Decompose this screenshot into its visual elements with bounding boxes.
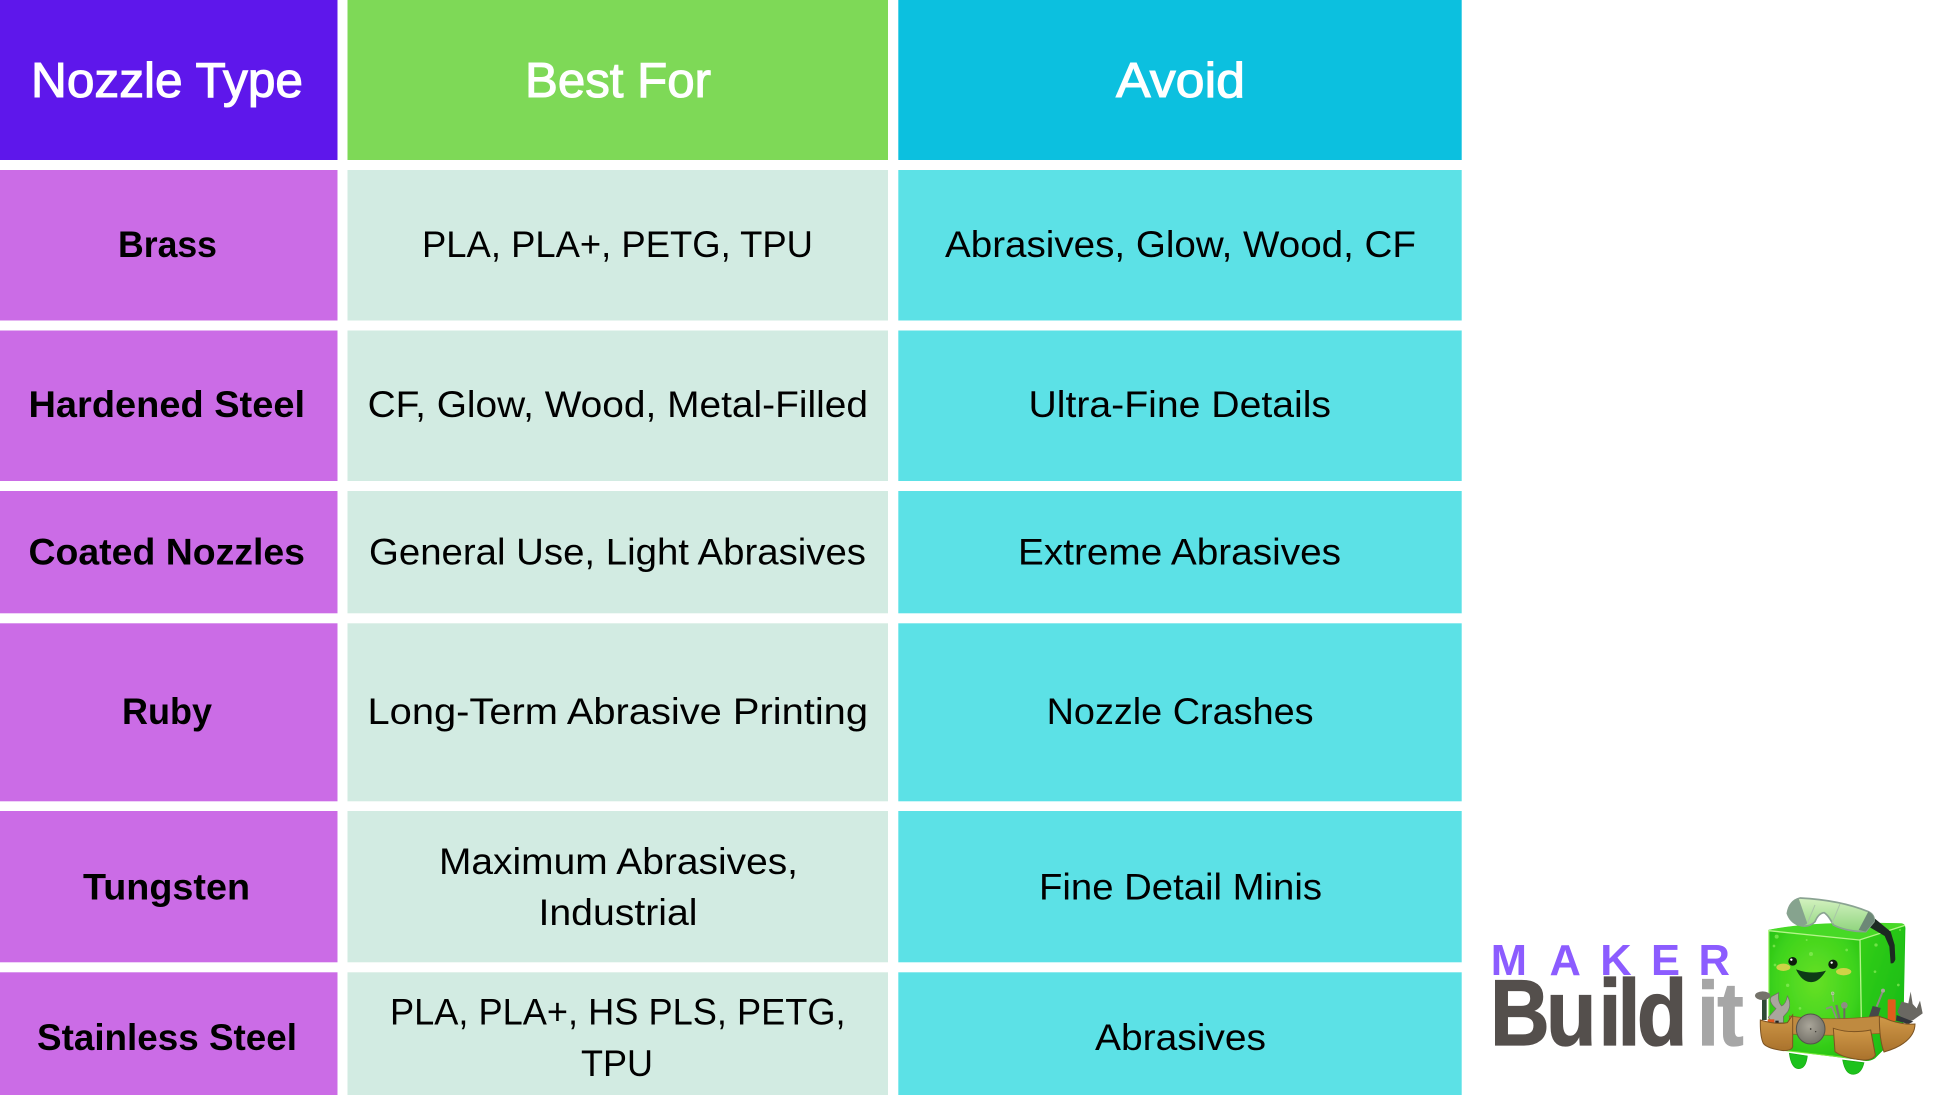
best for: Tungsten: Industrial (538, 891, 698, 933)
header: Best For (348, 0, 888, 160)
mascot goggles (1787, 898, 1895, 963)
avoid: Stainless Steel (898, 972, 1462, 1095)
logo: Maker Build it (1490, 898, 1923, 1074)
nozzle name: Brass: Brass (118, 223, 217, 265)
wordmark: MAKER: MAKER (1491, 937, 1730, 985)
row: Stainless Steel (0, 972, 1462, 1095)
row: Coated Nozzles (0, 491, 1462, 613)
icon: green jelly cube mascot with tool belt (1755, 898, 1923, 1074)
best for: Coated Nozzles: General Use, Light Abrasives (369, 530, 866, 572)
mascot cube body (1768, 923, 1905, 1061)
header: Nozzle Type: Nozzle Type (31, 54, 303, 108)
best for: Hardened Steel (348, 330, 888, 481)
row: Brass (0, 170, 1462, 320)
best for: Tungsten (348, 811, 888, 962)
nozzle name: Brass (0, 170, 338, 320)
header: Avoid: Avoid (1116, 54, 1245, 108)
logo wordmark (1490, 937, 1744, 1065)
mascot tools (1755, 989, 1923, 1034)
nozzle name: Ruby (0, 623, 338, 801)
comparison table (0, 0, 1462, 1095)
nozzle name: Coated Nozzles (0, 491, 338, 613)
header: Best For: Best For (525, 54, 711, 108)
nozzle name: Hardened Steel (0, 330, 338, 481)
nozzle name: Tungsten: Tungsten (83, 866, 250, 908)
avoid: Tungsten: Fine Detail Minis (1039, 866, 1322, 908)
avoid: Ruby: Nozzle Crashes (1047, 690, 1314, 732)
best for: Tungsten: Maximum Abrasives, (439, 840, 798, 882)
best for: Ruby (348, 623, 888, 801)
mascot tool belt (1760, 1014, 1915, 1060)
mascot feet (1789, 1053, 1864, 1074)
mascot face (1776, 957, 1851, 982)
avoid: Brass: Abrasives, Glow, Wood, CF (945, 223, 1416, 265)
nozzle name: Coated Nozzles: Coated Nozzles (28, 530, 305, 572)
row: Ruby (0, 623, 1462, 801)
nozzle name: Hardened Steel: Hardened Steel (28, 383, 305, 425)
row: Tungsten (0, 811, 1462, 962)
best for: Brass (348, 170, 888, 320)
nozzle name: Ruby: Ruby (122, 690, 212, 732)
row: Hardened Steel (0, 330, 1462, 481)
header: Nozzle Type (0, 0, 338, 160)
avoid: Coated Nozzles (898, 491, 1462, 613)
best for: Stainless Steel: PLA, PLA+, HS PLS, PETG, (390, 990, 846, 1032)
avoid: Hardened Steel (898, 330, 1462, 481)
wordmark: it: it (1697, 963, 1744, 1064)
best for: Stainless Steel (348, 972, 888, 1095)
nozzle name: Tungsten (0, 811, 338, 962)
avoid: Coated Nozzles: Extreme Abrasives (1018, 530, 1341, 572)
best for: Coated Nozzles (348, 491, 888, 613)
nozzle name: Stainless Steel (0, 972, 338, 1095)
header: Avoid (898, 0, 1462, 160)
nozzle name: Stainless Steel: Stainless Steel (37, 1016, 297, 1058)
best for: Stainless Steel: TPU (581, 1042, 653, 1084)
avoid: Brass (898, 170, 1462, 320)
best for: Ruby: Long-Term Abrasive Printing (368, 690, 868, 732)
avoid: Ruby (898, 623, 1462, 801)
best for: Brass: PLA, PLA+, PETG, TPU (422, 223, 813, 265)
avoid: Hardened Steel: Ultra-Fine Details (1028, 383, 1331, 425)
avoid: Tungsten (898, 811, 1462, 962)
avoid: Stainless Steel: Abrasives (1095, 1016, 1266, 1058)
best for: Hardened Steel: CF, Glow, Wood, Metal-Filled (368, 383, 868, 425)
mascot bubbles (1773, 929, 1901, 1010)
wordmark: Build: Build (1490, 960, 1687, 1065)
